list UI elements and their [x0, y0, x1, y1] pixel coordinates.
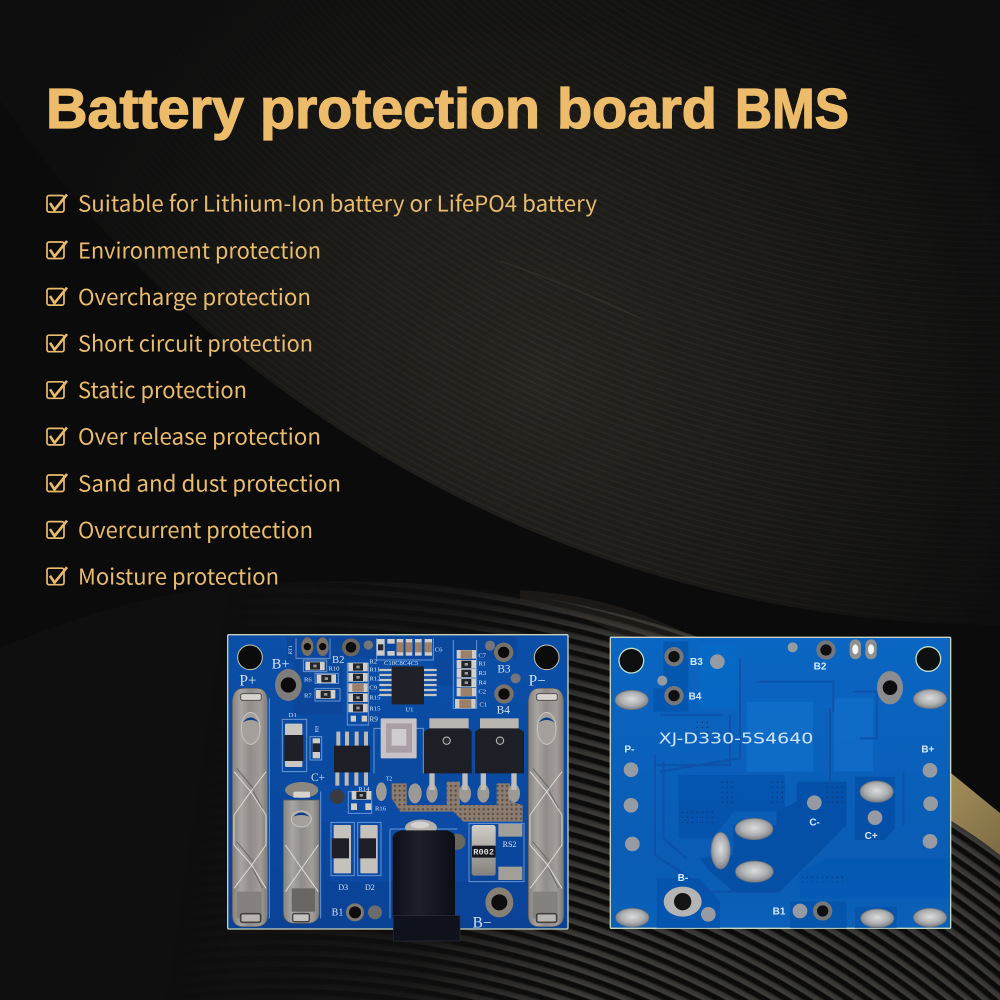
item: overcharge protection: Overcharge protection — [78, 280, 311, 312]
solder joints — [615, 689, 947, 928]
sense resistor R002 — [472, 824, 522, 880]
title — [46, 77, 849, 141]
through-hole pads — [664, 639, 903, 921]
diodes D3 and D2 — [332, 825, 378, 873]
background: lower wave with ribbed stripes and gold band — [282, 582, 1000, 1000]
silkscreen small labels: R8 — [314, 726, 320, 732]
DC jack connector — [393, 820, 465, 941]
diode D1 — [284, 724, 303, 767]
silkscreen outlines — [269, 638, 560, 918]
pad labels: C+ — [865, 831, 878, 842]
pads B plus B3 B4 — [275, 641, 521, 704]
silkscreen small labels: R15 — [369, 695, 381, 702]
pad labels: B1 — [773, 906, 786, 917]
pad labels: B- — [678, 873, 688, 884]
silkscreen small labels: C10C8C4C5 — [384, 660, 419, 667]
silkscreen small labels: R6 — [304, 677, 312, 684]
board: solder side of PCB — [610, 637, 951, 928]
feature checklist — [47, 187, 598, 591]
pcb body — [228, 635, 568, 929]
silkscreen small labels: T2 — [386, 776, 392, 782]
silkscreen small labels: U1 — [405, 707, 413, 714]
silkscreen large labels: B+ — [272, 656, 290, 672]
silkscreen small labels: R12 — [369, 675, 380, 682]
pad labels: B+ — [921, 744, 935, 755]
silkscreen small labels: R7 — [304, 693, 312, 700]
pad labels: B4 — [689, 692, 702, 703]
title: BMS — [735, 77, 849, 141]
silkscreen small labels: C2 — [478, 689, 486, 696]
metal contact strips — [232, 688, 564, 927]
pad labels: B2 — [814, 662, 827, 673]
silkscreen small labels: D1 — [289, 712, 297, 719]
sense resistor R002: R002 — [473, 848, 494, 858]
silkscreen small labels: R1 — [478, 661, 486, 668]
background: upper curved band with fine lines — [116, 0, 994, 618]
silkscreen large labels: B− — [473, 915, 492, 932]
item: moisture protection: Moisture protection — [78, 560, 279, 592]
silkscreen small labels: D2 — [365, 883, 375, 892]
pad labels: B3 — [690, 657, 703, 668]
pcb body — [610, 637, 951, 928]
silkscreen small labels: C1 — [479, 701, 487, 708]
silkscreen small labels: RT1 — [288, 645, 294, 654]
silkscreen small labels: R4 — [478, 679, 487, 686]
pad T2 and transistors — [381, 718, 524, 773]
item: short circuit protection: Short circuit protection — [78, 326, 313, 358]
pad labels: P- — [624, 744, 634, 755]
board: component side of PCB — [228, 635, 568, 941]
pad labels: C- — [809, 817, 820, 828]
copper trace regions — [653, 642, 950, 928]
silkscreen small labels: R3 — [478, 670, 487, 677]
mounting holes — [619, 647, 941, 673]
silkscreen large labels: B2 — [332, 655, 344, 666]
silkscreen large labels: B1 — [332, 908, 343, 919]
silkscreen small labels: R15 — [369, 705, 381, 712]
silkscreen small labels — [288, 645, 516, 892]
silkscreen small labels: C7 — [478, 653, 487, 660]
via dot fields — [680, 718, 847, 882]
silkscreen small labels: D3 — [338, 883, 348, 892]
silkscreen small labels: R16 — [375, 805, 387, 812]
chip U1 — [379, 666, 437, 704]
small vias — [624, 642, 938, 922]
silkscreen large labels — [239, 655, 546, 932]
silkscreen small labels: R2 — [369, 659, 377, 666]
silkscreen small labels: R14 — [358, 786, 370, 793]
title: board — [557, 77, 717, 141]
item: static protection: Static protection — [78, 373, 247, 405]
silkscreen small labels: R11 — [369, 667, 380, 674]
silkscreen small labels: C9 — [369, 685, 378, 692]
item: sand and dust protection: Sand and dust protection — [78, 466, 341, 498]
item: environment protection: Environment protection — [78, 233, 321, 265]
silkscreen large labels: B3 — [497, 663, 511, 675]
silkscreen small labels: RS2 — [503, 840, 516, 849]
silkscreen large labels: C+ — [311, 772, 325, 784]
mounting holes — [238, 645, 559, 670]
pads B minus and B1 — [346, 887, 513, 921]
chip SOP8 — [334, 732, 370, 786]
model number: XJ-D330-5S4640 — [659, 730, 813, 748]
silkscreen small labels: R10 — [328, 665, 340, 672]
silkscreen small labels: R9 — [369, 715, 378, 724]
item: overcurrent protection: Overcurrent protection — [78, 513, 313, 545]
silkscreen small labels: C6 — [435, 647, 443, 654]
silkscreen large labels: P− — [529, 673, 546, 690]
item: lithium battery suitability: Suitable for Lithium-Ion battery or LifePO4 battery — [78, 187, 598, 219]
pad labels — [624, 657, 935, 917]
title: protection — [260, 77, 540, 141]
top capacitors and RT1 pads — [301, 637, 432, 656]
item: over release protection: Over release protection — [78, 420, 321, 452]
silkscreen large labels: P+ — [239, 673, 257, 690]
silkscreen large labels: B4 — [497, 705, 510, 717]
resistors and capacitors — [305, 650, 476, 810]
title: Battery — [46, 77, 244, 141]
solder trace and transistor legs — [376, 773, 523, 822]
